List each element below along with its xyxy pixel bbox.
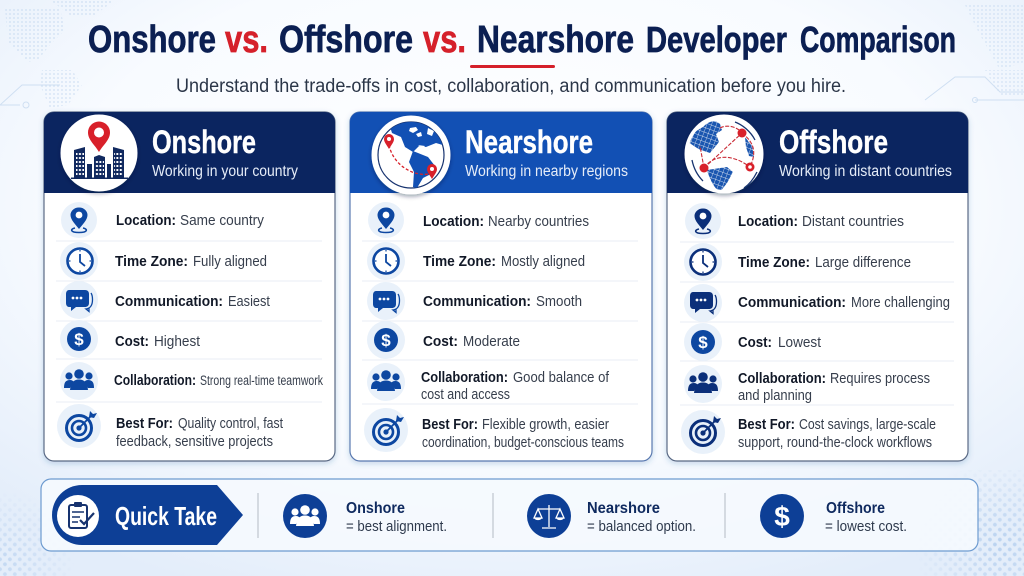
title: Onshore [88,19,216,61]
row: best for: Cost savings, large-scale [799,417,936,433]
row: best for: Best For: [116,416,173,432]
row: communication: Communication: [738,295,846,311]
row: communication: More challenging [851,295,950,311]
row: communication [684,284,950,322]
row: cost [367,321,520,359]
row: best for: feedback, sensitive projects [116,434,273,450]
row: cost: Lowest [778,335,821,351]
row: communication: Easiest [228,294,270,310]
row: time zone: Fully aligned [193,254,267,270]
nearshore subheading: Working in nearby regions [465,163,628,180]
row: best for: Flexible growth, easier [482,417,609,433]
subtitle: Understand the trade-offs in cost, collaboration, and communication before you hire. [176,76,846,97]
row: time zone: Time Zone: [115,254,188,270]
decorative dotted map: top right [965,5,1024,95]
nearshore heading: Nearshore [465,124,593,160]
title: Nearshore [477,19,634,61]
nearshore dividers [362,241,638,404]
row: collaboration: Collaboration: [421,370,508,386]
quick take badge [52,485,243,545]
quick take badge: Quick Take [115,501,217,531]
offshore subheading: Working in distant countries [779,163,952,180]
row: best for [364,408,624,452]
divider lines [258,493,725,538]
row: cost: Cost: [115,334,149,350]
row: best for [681,410,936,454]
offshore heading: Offshore [779,124,888,160]
row: location: Same country [180,213,265,229]
row: time zone: Time Zone: [423,254,496,270]
row: location [685,203,904,239]
row: communication: Communication: [423,294,531,310]
offshore takeaway: = lowest cost. [825,519,907,535]
offshore takeaway [760,494,907,538]
offshore takeaway: $ [774,501,790,532]
title: Comparison [800,19,956,60]
title: vs. [423,19,466,61]
row: best for: coordination, budget-conscious teams [422,435,624,451]
row: collaboration [684,365,930,404]
row: collaboration: Collaboration: [114,373,196,389]
onshore takeaway: Onshore [346,500,405,517]
row: collaboration: cost and access [421,387,510,403]
nearshore takeaway: Nearshore [587,500,660,517]
row: communication: Communication: [115,294,223,310]
row: collaboration [367,363,610,403]
row: best for: support, round-the-clock workflows [738,435,932,451]
row: cost: Highest [154,334,200,350]
row: location [61,202,265,238]
icon: globe of the Americas with route [372,116,450,194]
row: time zone: Large difference [815,255,911,271]
panel: nearshore [350,112,652,461]
title [88,19,956,61]
row: time zone: Time Zone: [738,255,810,271]
row: time zone [60,242,267,280]
decorative halftone corners [0,470,1024,576]
row: communication [367,282,582,320]
row: cost: $ [74,330,84,349]
row: cost [684,323,821,361]
row: time zone [684,243,911,281]
row: time zone: Mostly aligned [501,254,585,270]
row: best for: Quality control, fast [178,416,283,432]
row: collaboration [60,362,323,400]
row: location: Nearby countries [488,214,589,230]
row: communication [60,281,270,319]
panel: onshore [44,112,335,461]
row: cost [60,320,200,358]
panel: offshore [667,112,968,461]
row: collaboration: Collaboration: [738,371,826,387]
row: communication: Smooth [536,294,582,310]
onshore heading: Onshore [152,124,256,160]
title: vs. [225,19,268,61]
row: best for: Best For: [738,417,795,433]
row: best for [57,404,283,450]
title: Offshore [279,19,413,61]
row: time zone [367,242,585,280]
nearshore takeaway [527,494,696,538]
offshore dividers [680,242,954,405]
nearshore takeaway: = balanced option. [587,519,696,535]
row: best for: Best For: [422,417,478,433]
row: location: Location: [423,214,484,230]
title: Developer [646,19,787,60]
row: cost: Cost: [738,335,772,351]
row: collaboration: Strong real-time teamwork [200,373,323,388]
row: cost: $ [381,331,391,350]
onshore header [44,112,335,193]
icon: wireframe globe with network [684,114,764,194]
nearshore header [350,112,652,193]
row: collaboration: and planning [738,388,812,404]
row: cost: $ [698,333,708,352]
onshore subheading: Working in your country [152,163,298,180]
row: collaboration: Good balance of [513,370,610,386]
decorative circuit lines [0,77,1024,108]
row: location: Location: [738,214,798,230]
icon: city with map pin [60,114,138,192]
row: location [368,202,589,238]
row: location: Location: [116,213,176,229]
row: cost: Moderate [463,334,520,350]
title underline [470,65,555,68]
decorative dotted map: top left [5,0,115,108]
offshore header [667,112,968,193]
row: collaboration: Requires process [830,371,930,387]
onshore takeaway [283,494,447,538]
panel: quick take bar [41,479,978,551]
row: location: Distant countries [802,214,904,230]
row: cost: Cost: [423,334,458,350]
offshore takeaway: Offshore [826,500,885,517]
onshore takeaway: = best alignment. [346,519,447,535]
onshore dividers [56,241,322,402]
